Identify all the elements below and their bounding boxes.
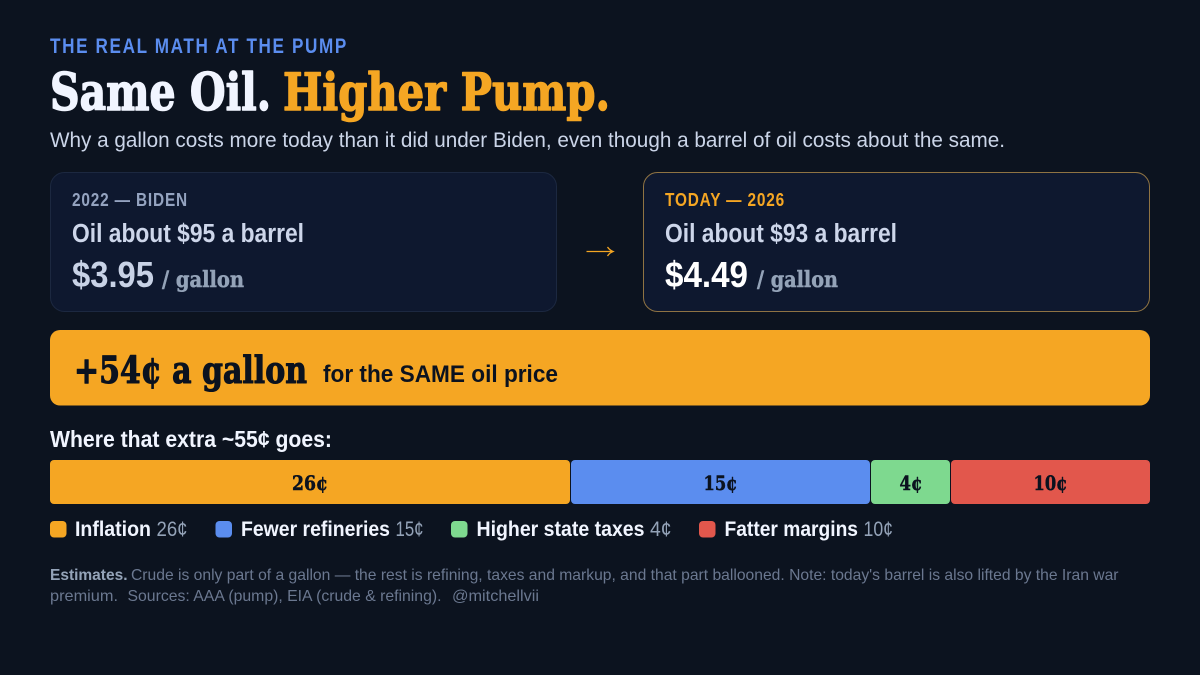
title bbox=[50, 63, 610, 123]
subtitle: Why a gallon costs more today than it did under Biden, even though a barrel of oil costs about the same. bbox=[50, 128, 1005, 152]
segment: state taxes: 4¢ bbox=[900, 471, 922, 495]
legend item: inflation: Inflation bbox=[75, 518, 151, 541]
legend item: inflation: 26¢ bbox=[156, 518, 188, 541]
arrow bbox=[586, 247, 613, 256]
callout note: for the SAME oil price bbox=[323, 361, 558, 388]
segment: refineries bbox=[571, 460, 870, 504]
gallon price: $3.95 bbox=[72, 254, 154, 295]
legend item: margins: 10¢ bbox=[864, 518, 893, 541]
segment: state taxes bbox=[871, 460, 950, 504]
footnote: @mitchellvii bbox=[452, 588, 539, 605]
legend bbox=[50, 518, 893, 541]
card label: 2022 — BIDEN bbox=[72, 189, 188, 210]
footnote: Crude is only part of a gallon — the rest is refining, taxes and markup, and that part ballooned. Note: today's barrel is also lifted by the Iran war bbox=[131, 567, 1119, 584]
segment: refineries: 15¢ bbox=[704, 471, 738, 495]
footnote: premium. bbox=[50, 588, 118, 605]
breakdown heading: Where that extra ~55¢ goes: bbox=[50, 426, 332, 452]
stacked bar chart bbox=[50, 460, 1150, 504]
panel: today 2026 bbox=[644, 172, 1150, 312]
legend item: refineries: Fewer refineries bbox=[241, 518, 390, 541]
callout banner bbox=[50, 330, 1150, 406]
segment: inflation bbox=[50, 460, 570, 504]
footnote bbox=[50, 567, 1119, 605]
footnote: Estimates. bbox=[50, 567, 128, 584]
legend item: state taxes: Higher state taxes bbox=[476, 518, 644, 541]
segment: margins bbox=[951, 460, 1150, 504]
eyebrow: THE REAL MATH AT THE PUMP bbox=[50, 35, 348, 58]
title: higher pump: Higher Pump. bbox=[283, 63, 610, 123]
panel: 2022 Biden bbox=[50, 172, 556, 312]
segment: inflation: 26¢ bbox=[292, 471, 328, 495]
legend item: margins: Fatter margins bbox=[724, 518, 858, 541]
segment: margins: 10¢ bbox=[1034, 471, 1068, 495]
callout figure: +54¢ a gallon bbox=[74, 348, 307, 392]
legend item: inflation bbox=[50, 518, 188, 541]
gallon price: $4.49 bbox=[665, 254, 748, 295]
legend item: state taxes: 4¢ bbox=[650, 518, 672, 541]
title: same oil: Same Oil. bbox=[50, 63, 271, 123]
per gallon unit: / gallon bbox=[757, 267, 838, 293]
per gallon unit: / gallon bbox=[162, 267, 244, 293]
card label: TODAY — 2026 bbox=[665, 189, 785, 210]
oil price: Oil about $93 a barrel bbox=[665, 220, 897, 248]
footnote: Sources: AAA (pump), EIA (crude & refining). bbox=[128, 588, 442, 605]
oil price: Oil about $95 a barrel bbox=[72, 220, 304, 248]
legend item: refineries: 15¢ bbox=[396, 518, 424, 541]
